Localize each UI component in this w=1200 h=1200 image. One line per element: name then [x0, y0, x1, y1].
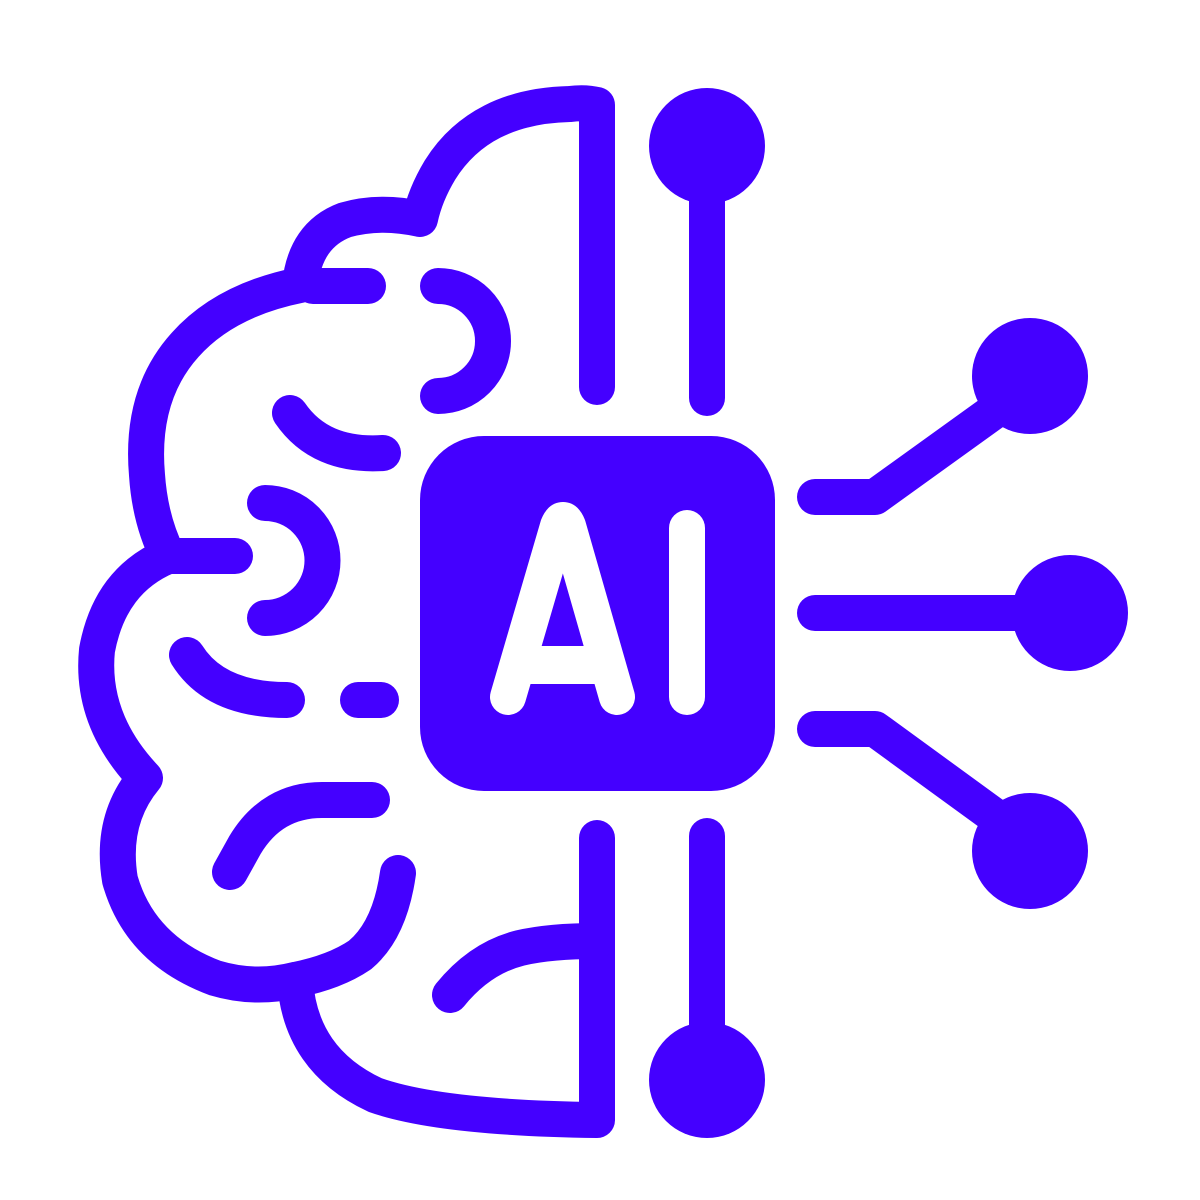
- chip: [420, 436, 775, 791]
- brain outline: [96, 103, 597, 1120]
- circuit lines: [707, 200, 1050, 1030]
- circuit nodes: [649, 88, 1128, 1138]
- letters AI: [508, 520, 687, 697]
- inner strokes: [168, 286, 597, 995]
